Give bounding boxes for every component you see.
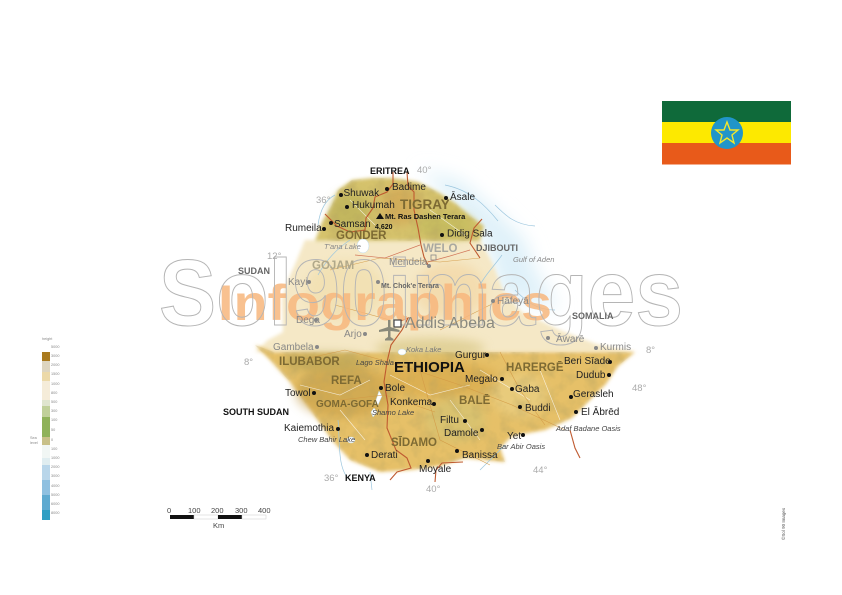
city labels: Gurgur — [455, 350, 487, 361]
city labels: Samsan — [334, 219, 371, 230]
elevation legend: 5000 — [51, 345, 59, 349]
water labels — [298, 242, 621, 451]
region labels: ILUBABOR — [279, 356, 340, 368]
graticule labels: 44° — [533, 465, 548, 476]
elevation legend: 500 — [51, 400, 57, 404]
city labels: Filtu — [440, 415, 459, 426]
copyright credit: ©Sol 90 Images — [780, 507, 786, 540]
southern lowlands — [255, 345, 635, 472]
elevation legend: 1000 — [51, 382, 59, 386]
scale bar: Km — [213, 521, 224, 530]
country labels: Addis Abeba — [405, 315, 495, 332]
city labels: Didig Sala — [447, 228, 493, 240]
country labels: SUDAN — [238, 266, 270, 276]
graticule labels: 36° — [316, 195, 331, 206]
Koka Lake — [398, 349, 406, 355]
water labels: Koka Lake — [406, 345, 441, 354]
city labels: Āsale — [450, 191, 475, 203]
pale central band — [255, 240, 635, 352]
scale bar: 400 — [258, 506, 271, 515]
city labels: El Ābrēd — [581, 406, 619, 418]
scale bar: 100 — [188, 506, 201, 515]
region labels: SĪDAMO — [391, 437, 437, 449]
coastal water glow — [420, 170, 560, 310]
water labels: Gulf of Aden — [513, 255, 554, 264]
water labels: Adaf Badane Oasis — [555, 424, 621, 433]
elevation legend: Sea — [30, 436, 38, 440]
region labels: GOMA-GOFA — [316, 399, 379, 410]
city labels: Āwarē — [556, 333, 585, 345]
city labels — [273, 182, 631, 475]
elevation legend: 300 — [51, 409, 57, 413]
graticule labels: 36° — [324, 473, 339, 484]
city labels: Dudub — [576, 370, 606, 381]
Tana Lake — [357, 239, 369, 253]
region labels: GOJAM — [312, 260, 354, 272]
flag of Ethiopia — [662, 101, 791, 164]
graticule labels: 40° — [417, 165, 432, 176]
city labels: Yet — [507, 431, 521, 442]
elevation legend: 3000 — [51, 474, 59, 478]
city labels: Buddi — [525, 403, 551, 414]
elevation legend: 1500 — [51, 372, 59, 376]
region labels — [279, 197, 564, 449]
city labels: Dega — [296, 315, 320, 326]
lakes and rivers — [318, 185, 555, 490]
elevation legend: 100 — [51, 447, 57, 451]
watermark: Infographics orange: Infographics — [218, 275, 552, 331]
city labels: Gambela — [273, 342, 314, 353]
region labels: HARERGĒ — [506, 362, 564, 374]
city labels: Beri Sīade — [564, 356, 611, 367]
water labels: Bar Abir Oasis — [497, 442, 545, 451]
region labels: REFA — [331, 375, 362, 387]
graticule labels: 40° — [426, 484, 441, 495]
country labels: SOMALIA — [572, 311, 614, 321]
city labels: Konkema — [390, 397, 433, 408]
country labels: ETHIOPIA — [394, 359, 465, 376]
scale bar — [167, 506, 271, 530]
city labels: Banissa — [462, 450, 498, 461]
water labels: T'ana Lake — [324, 242, 361, 251]
elevation legend: 50 — [51, 428, 55, 432]
country labels: DJIBOUTI — [476, 243, 518, 253]
city labels: Rumeila — [285, 223, 322, 234]
elevation legend: level — [30, 441, 38, 445]
scale bar: 0 — [167, 506, 171, 515]
water labels: Lago Shala — [356, 358, 394, 367]
city labels: Moyale — [419, 464, 452, 475]
city labels: Hukumah — [352, 200, 395, 211]
mountain labels: Mt. Chok'e Terara — [381, 283, 439, 290]
graticule labels: 8° — [646, 345, 655, 356]
borders — [325, 172, 580, 482]
city markers — [312, 187, 612, 463]
icon: airport plane — [379, 320, 400, 340]
city labels: Damole — [444, 428, 479, 439]
elevation legend: height — [42, 337, 53, 341]
elevation legend: 4000 — [51, 484, 59, 488]
scale bar: 300 — [235, 506, 248, 515]
graticule labels: 48° — [632, 383, 647, 394]
mountain labels: 4,620 — [375, 224, 393, 231]
country labels — [223, 166, 614, 483]
city labels: Badime — [392, 182, 426, 193]
city labels: Kurmis — [600, 342, 631, 353]
graticule labels: 8° — [244, 357, 253, 368]
region labels: BALĒ — [459, 395, 491, 407]
city labels: Mendela — [389, 257, 428, 268]
Chew Bahir Lake — [347, 437, 355, 443]
terrain shading — [280, 185, 548, 442]
road network — [300, 258, 565, 465]
country labels: ERITREA — [370, 166, 410, 176]
elevation legend: 2000 — [51, 363, 59, 367]
map: Ethiopia relief — [250, 170, 640, 490]
scale bar: 200 — [211, 506, 224, 515]
capital marker — [394, 320, 401, 327]
city labels: Gerasleh — [573, 389, 614, 400]
city labels: Gaba — [515, 384, 540, 395]
city labels: Bole — [385, 383, 405, 394]
city labels: Towol — [285, 388, 311, 399]
elevation legend: 2000 — [51, 465, 59, 469]
terrain texture — [250, 170, 640, 475]
city labels: Derati — [371, 450, 398, 461]
city labels: Megalo — [465, 374, 498, 385]
northern highlands — [315, 178, 484, 241]
graticule labels: 12° — [267, 251, 282, 262]
region labels: GONDER — [336, 230, 387, 242]
mountain labels: Mt. Ras Dashen Terara — [385, 212, 466, 221]
city labels: Shuwak — [344, 188, 380, 199]
city labels: Kayi — [288, 277, 307, 288]
icon: peak triangle — [376, 213, 384, 219]
city labels: Arjo — [344, 329, 362, 340]
elevation legend: 6000 — [51, 502, 59, 506]
country labels: SOUTH SUDAN — [223, 407, 289, 417]
city labels: Hāfeyā — [497, 296, 529, 307]
watermark: Sol90images outline: Sol90images — [159, 240, 683, 345]
water labels: Shamo Lake — [372, 408, 414, 417]
city labels: Kaiemothia — [284, 423, 334, 434]
region labels: TIGRAY — [400, 197, 450, 212]
region labels: WELO — [423, 243, 458, 255]
Shamo Lake — [375, 391, 382, 405]
mountain labels — [375, 212, 466, 290]
elevation legend: 1000 — [51, 456, 59, 460]
elevation legend: 5000 — [51, 493, 59, 497]
elevation legend: 100 — [51, 418, 57, 422]
elevation legend: 3000 — [51, 354, 59, 358]
water labels: Chew Bahir Lake — [298, 435, 355, 444]
elevation legend: 8000 — [51, 511, 59, 515]
country labels: KENYA — [345, 473, 376, 483]
elevation legend — [30, 337, 59, 520]
icon: Welo square marker — [431, 255, 436, 260]
elevation legend: 0 — [51, 438, 53, 442]
graticule labels — [244, 165, 655, 495]
elevation legend: 800 — [51, 391, 57, 395]
